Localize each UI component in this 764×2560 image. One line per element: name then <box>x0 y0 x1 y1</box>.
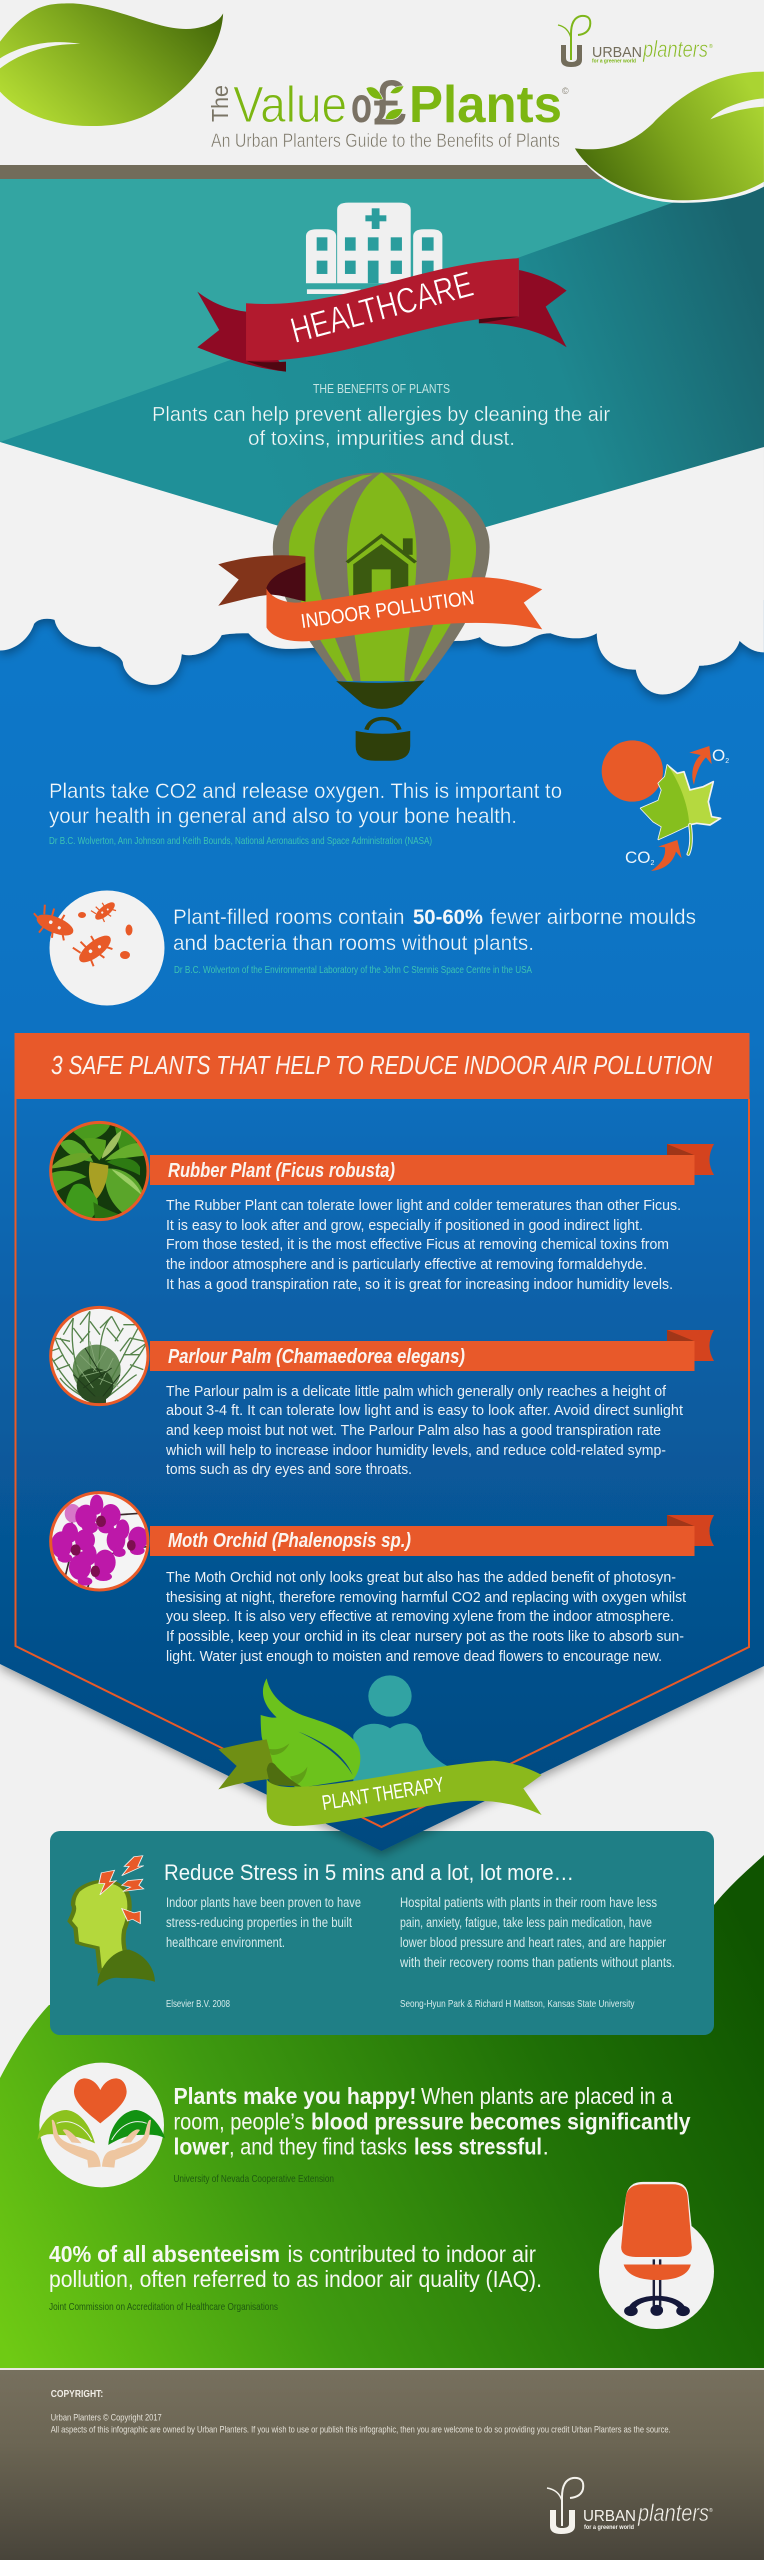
text: stress card: stress-reducing properties in the built <box>166 1915 352 1930</box>
plant 2: parlour palm <box>50 1307 714 1478</box>
logo: footer <box>547 2478 713 2534</box>
text: stress card: Hospital patients with plants in their room have less <box>400 1895 657 1910</box>
text: plants make you happy: When plants are placed in a <box>421 2083 673 2109</box>
text: moth orchid: light. Water just enough to moisten and remove dead flowers to encourage new. <box>166 1649 662 1665</box>
title <box>207 69 569 138</box>
icon: right leaf <box>575 72 764 203</box>
panel: blue pollution background <box>0 600 764 1851</box>
title: © <box>562 86 569 96</box>
text: mould fact: fewer airborne moulds <box>490 906 696 929</box>
text: parlour palm: toms such as dry eyes and sore throats. <box>166 1462 412 1478</box>
text: copyright: Urban Planters © Copyright 2017 <box>51 2412 162 2424</box>
ribbon <box>150 1330 714 1371</box>
text: parlour palm: The Parlour palm is a delicate little palm which generally only reaches a height of <box>166 1384 667 1400</box>
text: moth orchid: you sleep. It is also very effective at removing xylene from the indoor atmosphere. <box>166 1609 674 1625</box>
text: moth orchid <box>166 1570 686 1665</box>
ribbon: Parlour Palm (Chamaedorea elegans) <box>168 1346 465 1368</box>
icon: hands, leaves and heart <box>37 2063 165 2187</box>
indoor pollution ribbon <box>218 555 542 641</box>
text: mould fact <box>173 906 696 976</box>
icon: hospital <box>306 203 442 294</box>
icon: mould bug <box>28 896 133 971</box>
text: absenteeism: is contributed to indoor air <box>288 2241 536 2267</box>
logo: footer: URBAN <box>583 2508 636 2525</box>
panel: teal healthcare background <box>0 170 764 557</box>
ribbon: Moth Orchid (Phalenopsis sp.) <box>168 1530 411 1552</box>
text: parlour palm <box>165 1384 683 1478</box>
logo: top: URBAN <box>592 44 642 61</box>
text: rubber plant: the indoor atmosphere and is particularly effective at removing formaldehyde. <box>166 1257 647 1273</box>
text: stress card: pain, anxiety, fatigue, take less pain medication, have <box>400 1915 652 1930</box>
plant therapy ribbon: PLANT THERAPY <box>320 1773 446 1815</box>
subtitle: An Urban Planters Guide to the Benefits of Plants <box>211 131 560 152</box>
text: benefits intro: THE BENEFITS OF PLANTS <box>313 381 450 396</box>
text: parlour palm: about 3-4 ft. It can tolerate low light and is easy to look after. Avoid direct sunlight <box>166 1403 683 1419</box>
plant therapy ribbon <box>218 1739 542 1826</box>
icon: left leaf <box>0 3 223 126</box>
text: absenteeism: pollution, often referred to as indoor air quality (IAQ). <box>49 2266 542 2292</box>
logo: top: planters <box>642 36 708 62</box>
ribbon: Rubber Plant (Ficus robusta) <box>168 1160 395 1182</box>
text: mould fact: and bacteria than rooms without plants. <box>173 932 534 955</box>
logo: top: for a greener world <box>592 58 636 64</box>
text: rubber plant: It has a good transpiration rate, so it is great for increasing indoor humidity levels. <box>166 1277 673 1293</box>
label: CO2: 2 <box>650 860 654 867</box>
text: moth orchid: If possible, keep your orchid in its clear nursery pot as the roots like to absorb sun- <box>166 1629 684 1645</box>
logo: top <box>558 16 713 67</box>
text: plants make you happy: Plants make you happy! <box>174 2083 416 2109</box>
text: stress card: Elsevier B.V. 2008 <box>166 1998 230 2010</box>
text: stress card: healthcare environment. <box>166 1935 285 1950</box>
text: stress card <box>164 1860 675 2010</box>
text: CO2 fact <box>49 780 562 847</box>
ribbon <box>150 1515 714 1556</box>
text: rubber plant <box>166 1198 681 1293</box>
title: £ <box>373 69 406 138</box>
icon: photosynthesis leaf <box>602 740 721 871</box>
text: absenteeism <box>49 2241 542 2313</box>
text: copyright <box>51 2389 671 2436</box>
text: absenteeism: 40% of all absenteeism <box>49 2241 280 2267</box>
icon: pound leaves <box>366 86 404 120</box>
logo: footer: ® <box>709 2507 713 2514</box>
plant 1: rubber plant <box>50 1122 714 1293</box>
icon: plant therapy person and leaf <box>261 1675 447 1788</box>
citation: Joint Commission on Accreditation of Healthcare Organisations <box>49 2301 278 2313</box>
text: plants make you happy <box>174 2083 691 2185</box>
text: plants make you happy: , and they find tasks <box>229 2134 407 2160</box>
ribbon <box>150 1144 714 1185</box>
text: plants make you happy: less stressful <box>414 2134 542 2160</box>
plant 3: moth orchid <box>51 1493 714 1665</box>
title: The <box>207 85 233 122</box>
photo: rubber plant <box>50 1122 148 1222</box>
icon: office chair <box>599 2182 714 2329</box>
title: Plants <box>409 76 562 134</box>
text: rubber plant: From those tested, it is the most effective Ficus at removing chemical toxins from <box>166 1237 669 1253</box>
text: stress card: lower blood pressure and heart rates, and are happier <box>400 1935 666 1950</box>
label: CO2: CO <box>625 848 650 867</box>
text: mould fact: Plant-filled rooms contain <box>173 906 404 929</box>
text: rubber plant: It is easy to look after and grow, especially if positioned in good indirect light. <box>166 1218 643 1234</box>
title: Value <box>233 76 347 133</box>
text: stress card: with their recovery rooms than patients without plants. <box>399 1955 675 1970</box>
healthcare ribbon: HEALTHCARE <box>286 263 477 351</box>
text: stress card: Reduce Stress in 5 mins and a lot, lot more… <box>164 1860 574 1885</box>
citation: University of Nevada Cooperative Extension <box>174 2173 334 2185</box>
panel: stress card <box>50 1831 714 2035</box>
text: plants make you happy: room, people’s <box>174 2108 304 2134</box>
icon: stressed head <box>70 1856 155 1986</box>
text: CO2 fact: your health in general and also to your bone health. <box>49 805 517 828</box>
logo: footer: for a greener world <box>584 2525 634 2531</box>
indoor pollution ribbon: INDOOR POLLUTION <box>299 587 476 633</box>
text: parlour palm: and keep moist but not wet. The Parlour Palm also has a good transpiration rate <box>166 1423 661 1439</box>
text: stress card: Indoor plants have been proven to have <box>166 1895 361 1910</box>
logo: footer: planters <box>637 2500 709 2527</box>
text: parlour palm: which will help to increase indoor humidity levels, and reduce cold-related symp- <box>165 1443 666 1459</box>
label: O2: O <box>712 746 725 765</box>
photo: parlour palm <box>50 1307 148 1408</box>
panel: footer <box>0 2368 764 2560</box>
label: O2: 2 <box>725 758 729 765</box>
text: benefits intro: of toxins, impurities and dust. <box>248 428 515 450</box>
text: moth orchid: thesising at night, therefore removing harmful CO2 and replacing with oxygen whilst <box>166 1590 686 1606</box>
logo: top: ® <box>709 43 713 50</box>
citation: Dr B.C. Wolverton of the Environmental Laboratory of the John C Stennis Space Centre in the USA <box>174 964 532 976</box>
text: plants make you happy: blood pressure becomes significantly <box>311 2108 691 2134</box>
paper with cloud edge <box>0 432 764 694</box>
heading bar: safe plants <box>14 1033 750 1099</box>
background: green wave <box>0 1855 764 2368</box>
title: o <box>351 77 372 133</box>
text: stress card: Seong-Hyun Park & Richard H Mattson, Kansas State University <box>400 1998 635 2010</box>
header band <box>0 165 764 179</box>
text: mould fact: 50-60% <box>413 906 483 929</box>
text: CO2 fact: Plants take CO2 and release oxygen. This is important to <box>49 780 562 803</box>
text: plants make you happy: lower <box>174 2134 229 2160</box>
icon: mould circle <box>28 890 165 1006</box>
text: rubber plant: The Rubber Plant can tolerate lower light and colder temeratures than other Ficus. <box>166 1198 681 1214</box>
icon: house <box>347 536 416 597</box>
text: moth orchid: The Moth Orchid not only looks great but also has the added benefit of photosyn- <box>166 1570 676 1586</box>
text: benefits intro <box>152 381 610 450</box>
text: plants make you happy: . <box>542 2134 549 2160</box>
icon: hot air balloon <box>273 473 490 761</box>
text: benefits intro: Plants can help prevent allergies by cleaning the air <box>152 404 610 426</box>
citation: Dr B.C. Wolverton, Ann Johnson and Keith Bounds, National Aeronautics and Space Administration (NASA) <box>49 835 432 847</box>
panel frame: safe plants <box>16 1099 749 1827</box>
healthcare ribbon <box>197 258 567 372</box>
text: copyright: COPYRIGHT: <box>51 2389 103 2400</box>
photo: moth orchid <box>51 1493 148 1591</box>
